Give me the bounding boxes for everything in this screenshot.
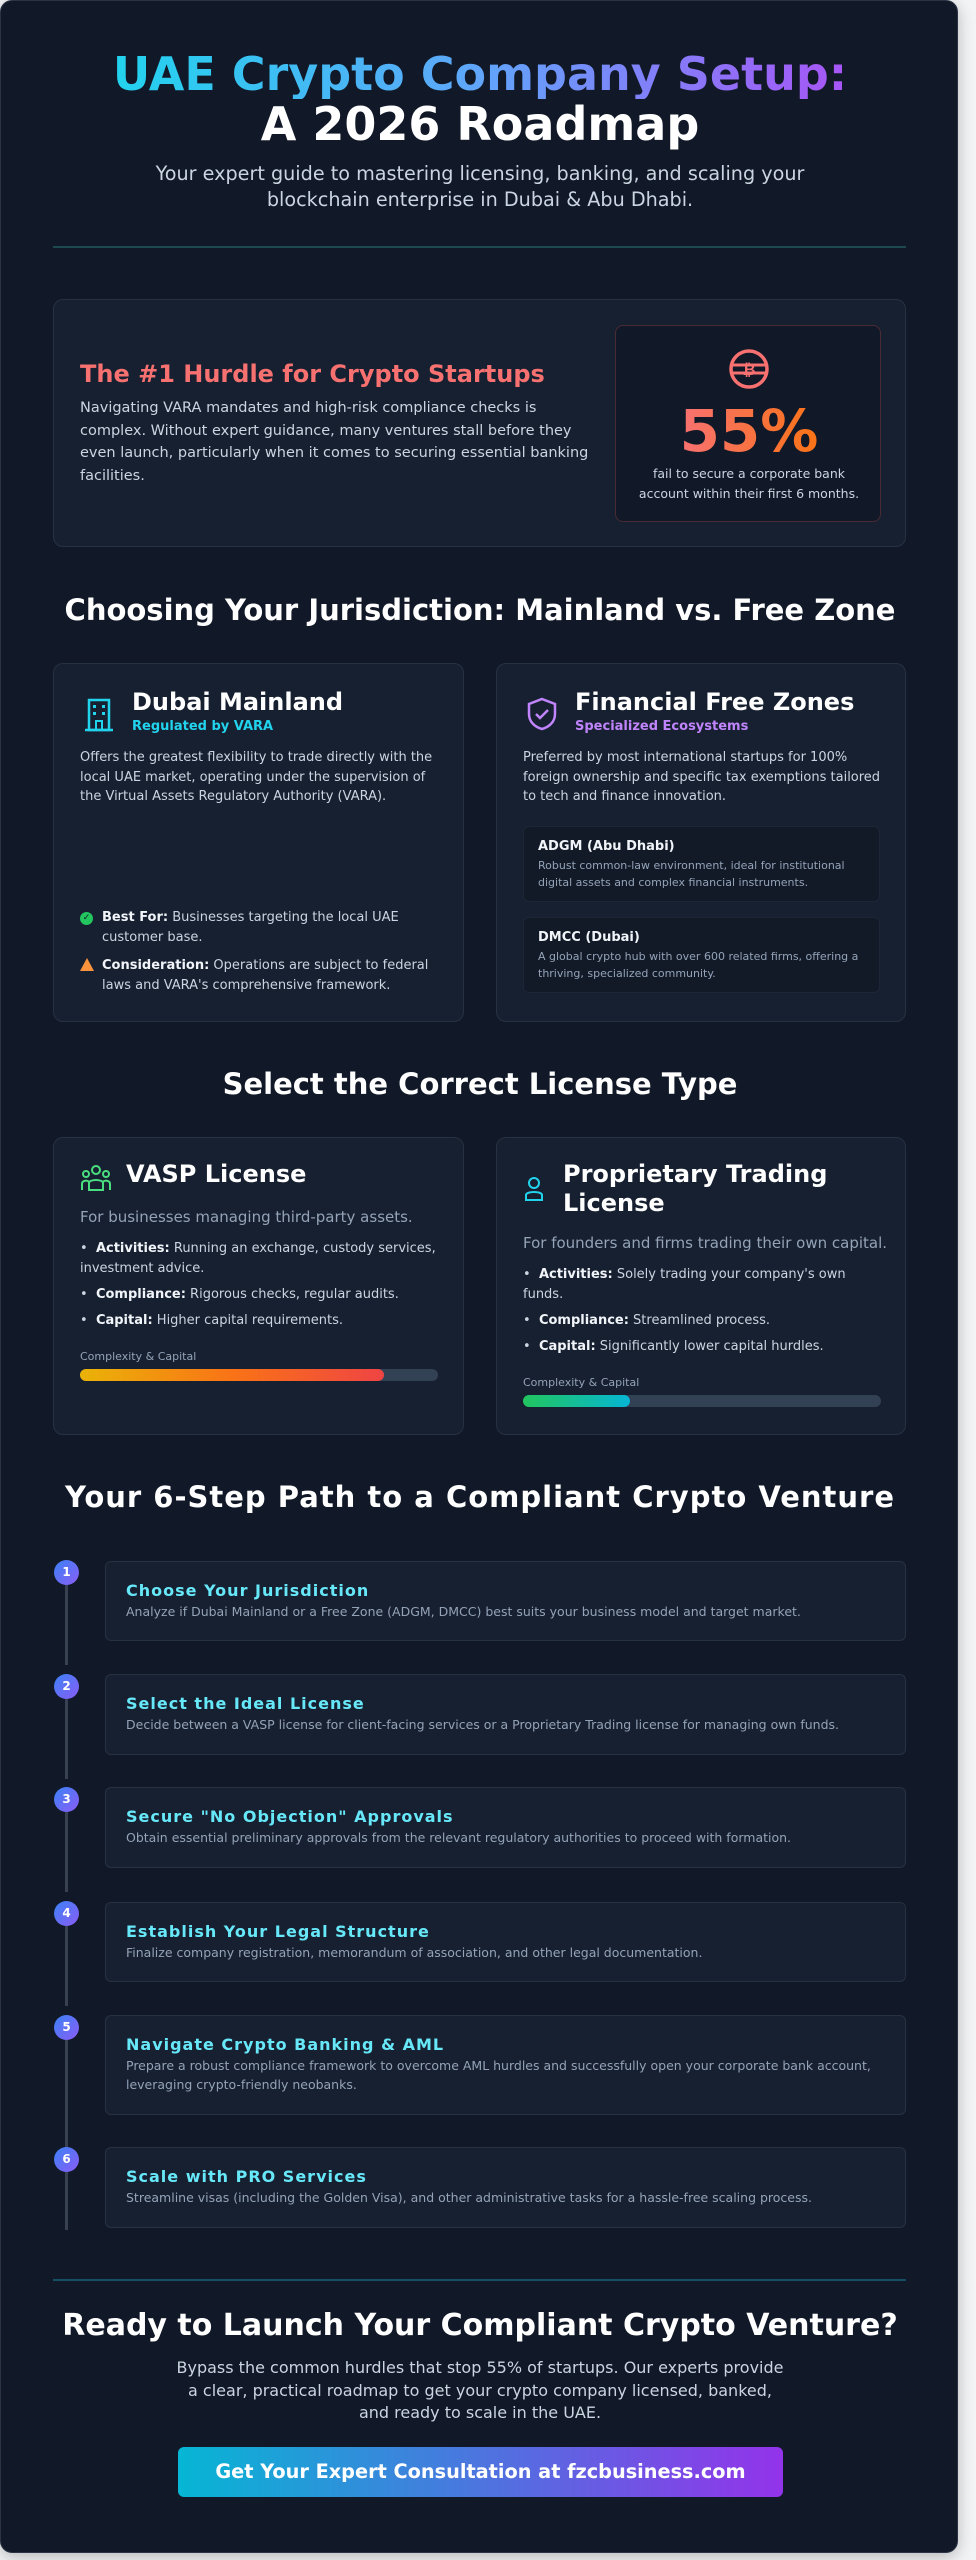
stat caption: account within their first 6 months.	[639, 486, 859, 500]
panel: hurdle	[53, 299, 906, 547]
CTA text: and ready to scale in the UAE.	[359, 2403, 601, 2422]
title	[113, 47, 847, 151]
free zone title: Specialized Ecosystems	[575, 719, 748, 734]
CTA text	[177, 2358, 783, 2422]
prop complexity bar: Complexity & Capital	[523, 1376, 639, 1389]
ADGM box: ADGM (Abu Dhabi)	[538, 839, 675, 854]
stat caption: fail to secure a corporate bank	[653, 466, 845, 481]
DMCC box	[523, 917, 880, 993]
prop subtitle: For founders and firms trading their own capital.	[523, 1234, 887, 1252]
hurdle text: Navigating VARA mandates and high-risk compliance checks is complex. Without expert guidance, many ventures stall before they even launch, particularly when it comes to securing essential banking facilities.	[80, 400, 588, 484]
subtitle: blockchain enterprise in Dubai & Abu Dhabi.	[267, 188, 693, 211]
subtitle	[156, 162, 804, 211]
step 3: 3	[62, 1792, 71, 1806]
prop title: Proprietary Trading	[563, 1160, 827, 1188]
heading: license: Select the Correct License Type	[223, 1067, 737, 1101]
icon: shield	[528, 698, 556, 730]
icon: building	[85, 698, 113, 732]
step 6	[54, 2147, 906, 2228]
step 2	[54, 1674, 906, 1755]
free zone text: Preferred by most international startups for 100% foreign ownership and specific tax exemptions tailored to tech and finance innovation.	[523, 750, 880, 804]
mainland title: Dubai Mainland	[132, 688, 343, 716]
step 4: Finalize company registration, memorandum of association, and other legal documentation.	[126, 1945, 702, 1960]
step 5: 5	[62, 2020, 71, 2034]
prop title	[563, 1160, 827, 1217]
VASP bullets: • Compliance: Rigorous checks, regular audits.	[80, 1287, 399, 1302]
timeline	[65, 1585, 68, 2230]
step 5: Navigate Crypto Banking & AML	[126, 2035, 444, 2054]
step 4: Establish Your Legal Structure	[126, 1922, 430, 1941]
stat box	[615, 325, 881, 522]
icon: blocked coin	[729, 349, 769, 389]
CTA text: a clear, practical roadmap to get your crypto company licensed, banked,	[188, 2380, 772, 2400]
step 6: Streamline visas (including the Golden Visa), and other administrative tasks for a hassle-free scaling process.	[126, 2190, 812, 2205]
step 1	[54, 1560, 906, 1641]
prop bullets: • Compliance: Streamlined process.	[523, 1313, 770, 1328]
panel: Dubai Mainland	[53, 663, 464, 1022]
mainland bullets: Consideration: Operations are subject to federal laws and VARA's comprehensive framework.	[102, 958, 428, 992]
heading: jurisdiction: Choosing Your Jurisdiction: Mainland vs. Free Zone	[65, 593, 895, 627]
mainland text: Offers the greatest flexibility to trade directly with the local UAE market, operating under the supervision of the Virtual Assets Regulatory Authority (VARA).	[80, 750, 432, 804]
VASP complexity bar: Complexity & Capital	[80, 1350, 196, 1363]
step 2: 2	[62, 1679, 71, 1693]
free zone title	[575, 688, 854, 734]
step 2: Select the Ideal License	[126, 1694, 365, 1713]
VASP bullets: • Activities: Running an exchange, custody services, investment advice.	[80, 1241, 436, 1276]
step 3: Obtain essential preliminary approvals from the relevant regulatory authorities to proceed with formation.	[126, 1830, 791, 1845]
step 3	[54, 1787, 906, 1868]
VASP subtitle: For businesses managing third-party assets.	[80, 1208, 413, 1226]
step 5	[54, 2015, 906, 2115]
step 6: 6	[62, 2152, 71, 2166]
subtitle: Your expert guide to mastering licensing, banking, and scaling your	[156, 162, 804, 185]
panel: VASP	[53, 1137, 464, 1435]
stat number: 55%	[680, 397, 818, 465]
title: A 2026 Roadmap	[261, 97, 699, 151]
DMCC box: DMCC (Dubai)	[538, 930, 640, 945]
CTA button: Get Your Expert Consultation at fzcbusiness.com	[215, 2460, 746, 2483]
panel: Free Zones	[496, 663, 906, 1022]
panel: Proprietary Trading	[496, 1137, 906, 1435]
mainland title	[132, 688, 343, 734]
step 1: Choose Your Jurisdiction	[126, 1581, 369, 1600]
step 6: Scale with PRO Services	[126, 2167, 367, 2186]
step 1: Analyze if Dubai Mainland or a Free Zone (ADGM, DMCC) best suits your business model and target market.	[126, 1604, 801, 1619]
heading: steps: Your 6-Step Path to a Compliant Crypto Venture	[65, 1480, 895, 1514]
icon: group	[81, 1165, 111, 1191]
stat caption	[639, 466, 859, 500]
CTA text: Bypass the common hurdles that stop 55% of startups. Our experts provide	[177, 2358, 783, 2377]
prop bullets: • Capital: Significantly lower capital hurdles.	[523, 1339, 824, 1354]
mainland bullets: ✓	[83, 913, 90, 923]
prop bullets: • Activities: Solely trading your company's own funds.	[523, 1267, 846, 1302]
step 4: 4	[62, 1906, 71, 1920]
CTA button	[178, 2447, 783, 2497]
step 2: Decide between a VASP license for client-facing services or a Proprietary Trading license for managing own funds.	[126, 1717, 839, 1732]
ADGM box: Robust common-law environment, ideal for institutional digital assets and complex financial instruments.	[538, 859, 845, 889]
prop title: License	[563, 1189, 665, 1217]
step 1: 1	[62, 1565, 71, 1579]
step 4	[54, 1901, 906, 1982]
step 3: Secure "No Objection" Approvals	[126, 1807, 454, 1826]
VASP title: VASP License	[126, 1160, 306, 1188]
mainland bullets	[80, 910, 428, 992]
icon: person	[525, 1177, 543, 1201]
VASP bullets	[80, 1241, 436, 1328]
free zone title: Financial Free Zones	[575, 688, 854, 716]
DMCC box: A global crypto hub with over 600 related firms, offering a thriving, specialized community.	[538, 950, 858, 980]
hurdle heading: The #1 Hurdle for Crypto Startups	[80, 360, 545, 388]
title: UAE Crypto Company Setup:	[113, 47, 847, 101]
prop bullets	[523, 1267, 846, 1354]
ADGM box	[523, 826, 880, 902]
step 5: Prepare a robust compliance framework to overcome AML hurdles and successfully open your corporate bank account, leveraging crypto-friendly neobanks.	[126, 2058, 871, 2092]
mainland bullets: Best For: Businesses targeting the local UAE customer base.	[102, 910, 399, 944]
VASP bullets: • Capital: Higher capital requirements.	[80, 1313, 343, 1328]
CTA heading: Ready to Launch Your Compliant Crypto Venture?	[62, 2308, 898, 2343]
mainland title: Regulated by VARA	[132, 719, 273, 734]
icon: blocked coin: ₿	[742, 360, 756, 379]
